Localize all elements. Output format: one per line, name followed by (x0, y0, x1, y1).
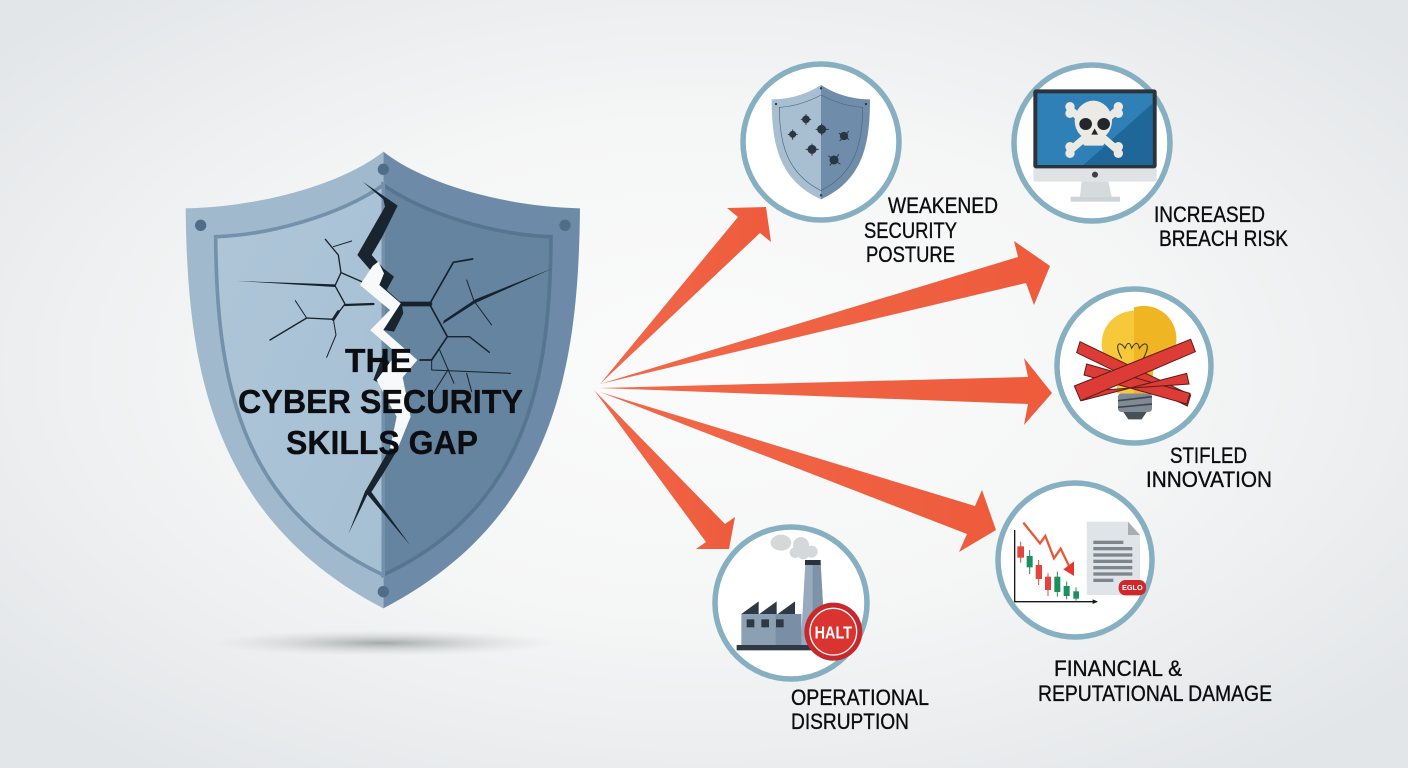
main crack dark edge (357, 182, 403, 332)
label (1154, 202, 1288, 251)
main crack lower dark edge (365, 353, 398, 492)
shield ground shadow (208, 630, 558, 656)
title text (238, 342, 523, 461)
rivets (195, 164, 571, 597)
label (1038, 656, 1272, 706)
icon: falling chart and report: EGLO (1122, 583, 1143, 592)
panel: increased breach risk (1014, 65, 1288, 251)
arrow: to operational disruption (594, 390, 735, 549)
icon ring (715, 527, 867, 679)
icon: damaged shield (772, 85, 870, 199)
title text: THE (345, 342, 412, 379)
label: INCREASED (1154, 202, 1265, 227)
arrow: to weakened security posture (600, 207, 771, 384)
label: BREACH RISK (1159, 226, 1288, 251)
shield left half (186, 152, 383, 608)
label: POSTURE (866, 242, 955, 267)
label: WEAKENED (888, 193, 998, 218)
icon: crossed out light bulb (1074, 306, 1195, 419)
arrow: to financial damage (600, 392, 996, 552)
icon ring (1014, 65, 1170, 221)
icon: falling chart and report (1015, 522, 1146, 604)
tapered cracks (237, 268, 553, 545)
label: STIFLED (1170, 443, 1247, 468)
shield inner face left (216, 185, 383, 575)
title text: CYBER SECURITY (238, 383, 523, 420)
icon ring (998, 483, 1152, 637)
label: DISRUPTION (791, 709, 909, 734)
title text: SKILLS GAP (286, 424, 478, 461)
panel: stifled innovation (1057, 289, 1272, 492)
arrow: to increased breach risk (600, 241, 1050, 384)
panel: operational disruption (715, 527, 929, 734)
label: REPUTATIONAL DAMAGE (1038, 681, 1272, 706)
label: FINANCIAL & (1054, 656, 1182, 681)
shield inner face right (383, 185, 551, 575)
label: SECURITY (864, 218, 957, 243)
central cracked shield (186, 152, 580, 608)
arrow: to stifled innovation (600, 358, 1052, 425)
icon: monitor with skull (1033, 89, 1157, 202)
label (791, 685, 929, 734)
shield right half (383, 152, 580, 608)
label (1146, 443, 1272, 492)
icon: halted factory: HALT (815, 623, 852, 643)
panel: weakened security posture (743, 64, 998, 267)
icon ring (743, 64, 899, 220)
label: OPERATIONAL (791, 685, 929, 710)
panel: financial and reputational damage (998, 483, 1272, 706)
icon: halted factory (737, 535, 862, 661)
hairline cracks (270, 239, 511, 398)
main crack white core (360, 262, 417, 449)
icon ring (1057, 289, 1211, 443)
label: INNOVATION (1146, 467, 1272, 492)
label (864, 193, 998, 267)
